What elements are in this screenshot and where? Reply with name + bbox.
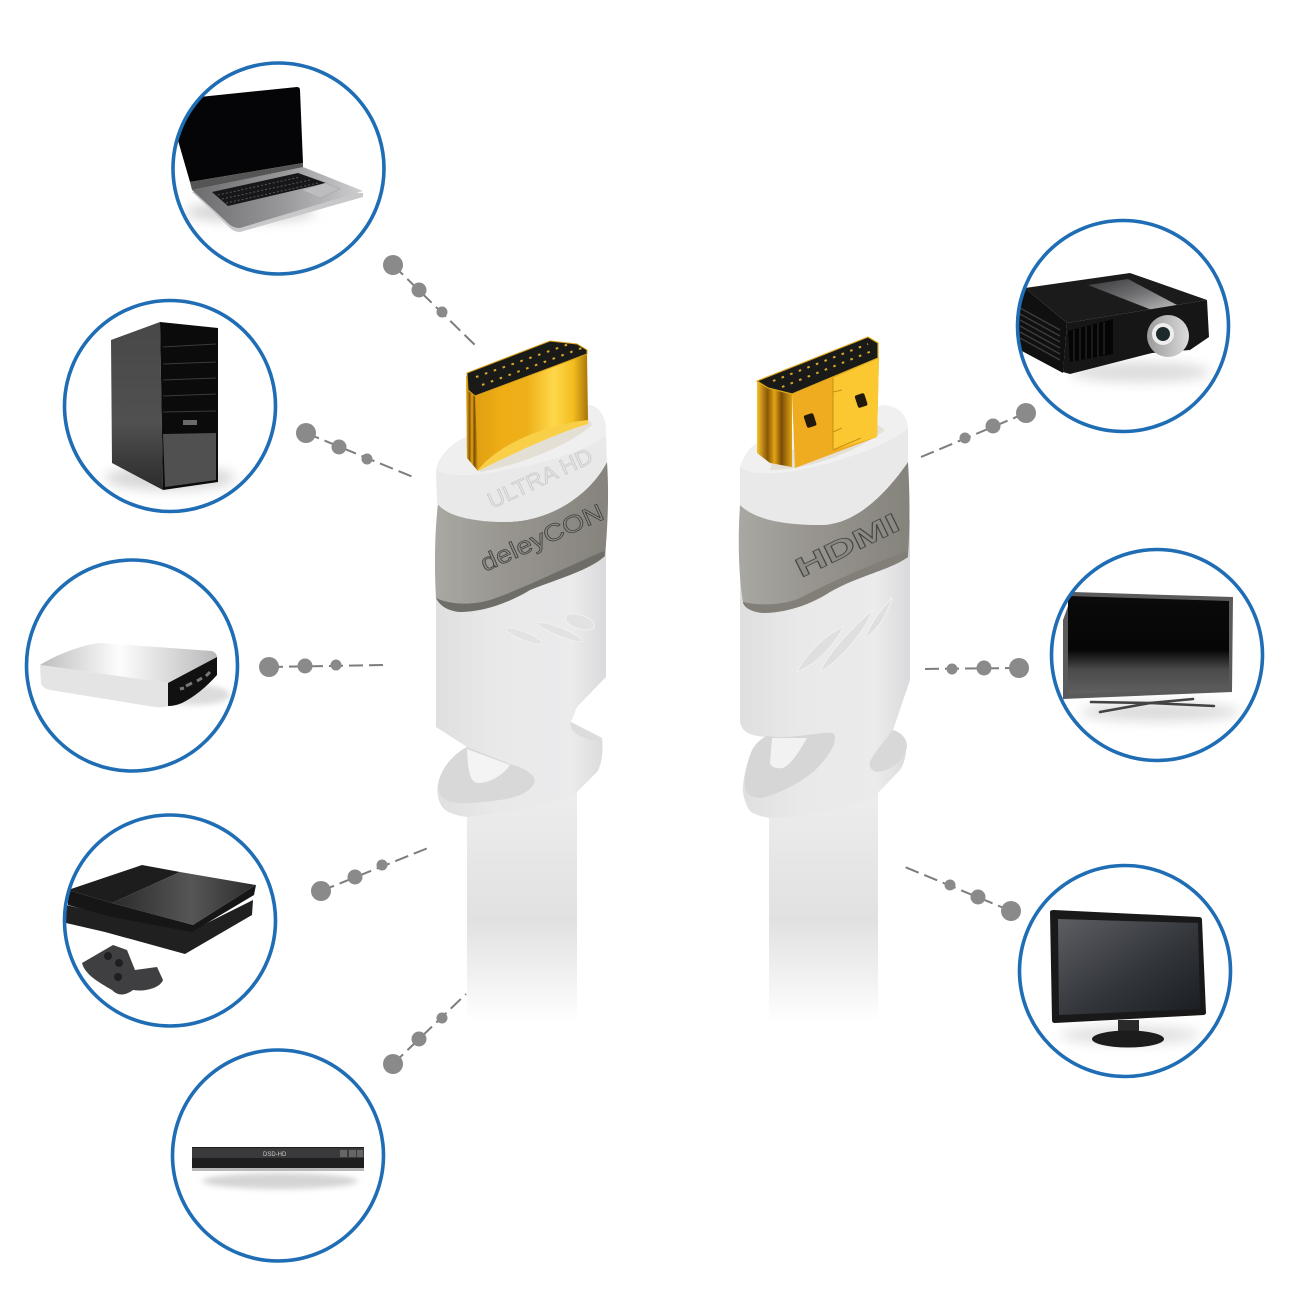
panel: monitor — [1020, 866, 1230, 1076]
left inner cable stub — [467, 749, 510, 783]
laptop trackpad — [302, 183, 340, 198]
text: HDMI: HDMI — [790, 507, 904, 583]
right plug white housing — [740, 520, 910, 818]
left contact opening — [467, 341, 587, 396]
connector: projector — [921, 403, 1036, 457]
panel: television — [1052, 550, 1262, 760]
left white collar — [436, 405, 607, 522]
projector top — [1025, 273, 1207, 323]
right strain relief hole — [745, 733, 835, 798]
tower front controls — [183, 420, 197, 425]
right contact opening — [757, 337, 878, 394]
left gold shell — [466, 352, 588, 471]
left small wing opening — [570, 722, 602, 741]
mini pc top — [40, 643, 217, 683]
laptop hinge — [190, 163, 303, 190]
player buttons — [340, 1150, 363, 1157]
left flat cable — [467, 780, 577, 1022]
monitor base — [1092, 1030, 1164, 1048]
left grip marks — [505, 611, 596, 647]
projector lens — [1147, 315, 1189, 357]
left plug white housing — [436, 520, 606, 817]
console front edge — [68, 885, 256, 932]
monitor neck — [1118, 1020, 1139, 1034]
tower front — [160, 322, 218, 490]
right plug hole left — [803, 413, 817, 428]
panel: desktop tower — [64, 300, 276, 512]
connector: television — [919, 658, 1029, 678]
monitor screen — [1058, 919, 1200, 1015]
right gold front face — [792, 358, 879, 468]
right gold pins — [773, 344, 872, 387]
connector: desktop tower — [296, 423, 413, 477]
panel: laptop — [170, 63, 384, 274]
mini pc front — [40, 665, 168, 707]
left gold pins — [476, 343, 582, 385]
player display strip — [192, 1148, 364, 1158]
player body — [192, 1147, 364, 1168]
connector: monitor — [905, 867, 1021, 921]
connector: game console — [311, 848, 428, 901]
text: ULTRA HD: ULTRA HD — [484, 443, 597, 514]
panel: mini pc — [26, 560, 238, 771]
projector front vent — [1068, 319, 1113, 362]
laptop screen — [170, 87, 303, 182]
laptop base — [192, 167, 363, 228]
right grip marks — [797, 598, 892, 672]
left gray band — [435, 462, 608, 612]
console top right — [112, 872, 256, 925]
text: player label: DSD-HD — [263, 1152, 287, 1158]
console top left — [68, 865, 180, 903]
right flat cable — [769, 780, 878, 1022]
mini pc rear ports — [168, 657, 217, 706]
text: deleyCON: deleyCON — [476, 499, 608, 577]
laptop base edge — [192, 192, 363, 232]
projector control strip — [1088, 279, 1177, 310]
projector left side — [1019, 289, 1067, 373]
connector: mini pc — [259, 657, 385, 677]
tower side — [111, 322, 163, 490]
right gold side face — [757, 381, 792, 467]
projector front — [1063, 300, 1209, 374]
panel: game console — [64, 815, 276, 1026]
connector: laptop — [383, 255, 477, 347]
tv frame — [1063, 592, 1233, 699]
panel: projector — [1000, 220, 1228, 432]
connector: blu-ray player — [383, 994, 466, 1074]
right gray band — [739, 462, 910, 613]
right HDMI plug — [739, 337, 910, 818]
right white collar — [740, 405, 908, 525]
console lower layer — [66, 900, 253, 954]
tv screen — [1068, 596, 1229, 678]
tower drive bays — [163, 344, 216, 412]
left HDMI plug — [435, 341, 608, 817]
monitor frame — [1050, 910, 1206, 1023]
right inner cable stub — [770, 738, 807, 768]
right plug hole right — [854, 393, 868, 408]
left strain relief hole — [438, 747, 535, 803]
right small wing opening — [870, 730, 907, 772]
panel: blu-ray player — [172, 1050, 384, 1261]
player silver base — [192, 1168, 364, 1171]
tower lower door — [163, 433, 216, 487]
tv stand — [1091, 699, 1214, 712]
controller — [82, 945, 163, 994]
laptop keyboard — [212, 173, 326, 206]
